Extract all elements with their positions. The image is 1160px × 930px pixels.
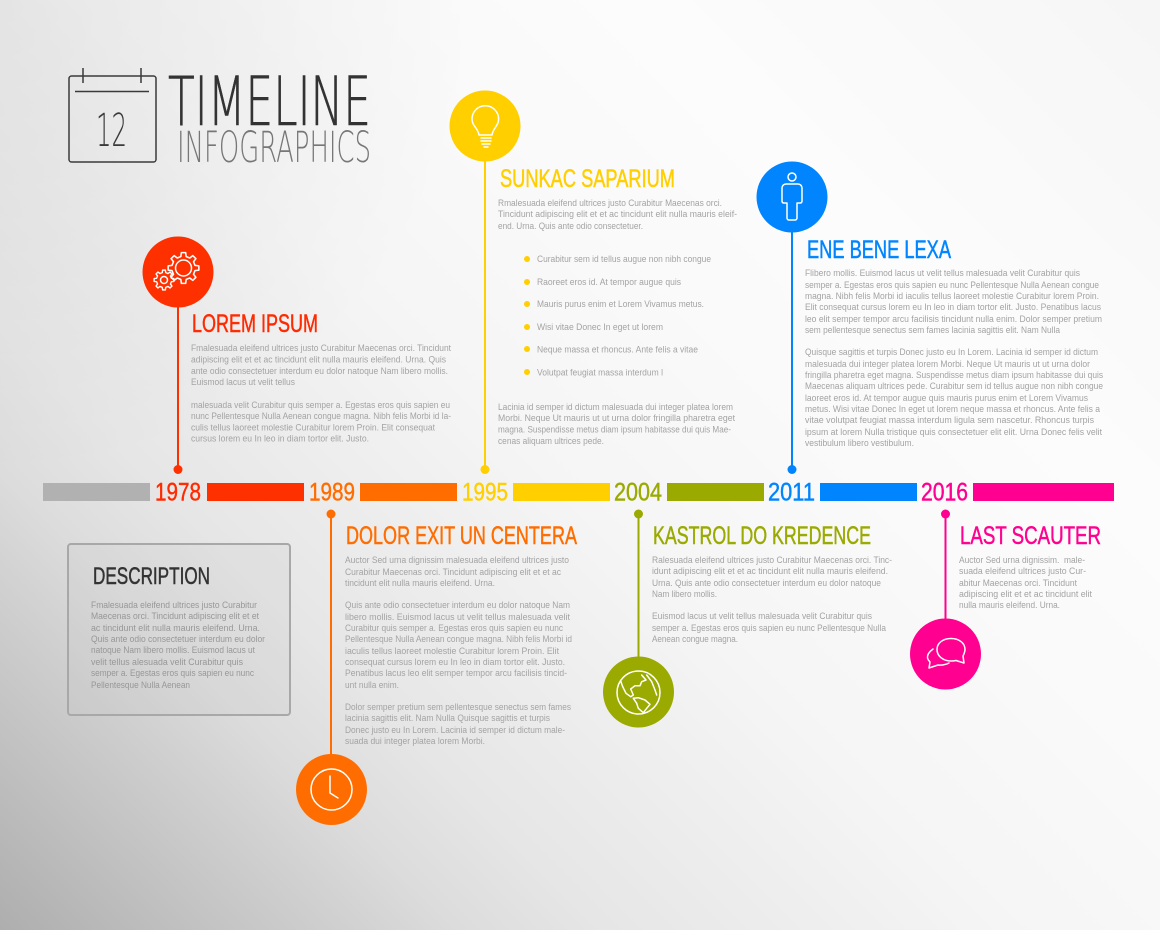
body text: velit tellus alesuada velit Curabitur quis bbox=[91, 657, 243, 668]
bar segment: yellow bbox=[513, 483, 610, 501]
panel: ene bene lexa bbox=[805, 236, 1103, 449]
body text: Curabitur quis semper a. Egestas eros quis sapien eu nunc bbox=[345, 623, 563, 634]
body text: Euismod lacus ut velit tellus bbox=[191, 377, 295, 388]
body text: ac tincidunt elit nulla mauris eleifend. Urna. bbox=[91, 623, 260, 634]
body text: abitur Maecenas orci. Tincidunt bbox=[959, 578, 1077, 589]
bar segment: orange bbox=[360, 483, 457, 501]
icon: calendar: 12 bbox=[96, 104, 127, 157]
timeline bar bbox=[43, 478, 1114, 506]
body text: Quis ante odio consectetuer interdum eu dolor bbox=[91, 634, 266, 645]
body text: consequat cursus lorem eu In leo in diam tortor elit. Justo. bbox=[345, 657, 565, 668]
bullet list: Raoreet eros id. At tempor augue quis bbox=[537, 277, 681, 288]
body text bbox=[345, 555, 572, 747]
intro text: Rmalesuada eleifend ultrices justo Curabitur Maecenas orci. bbox=[498, 198, 722, 209]
panel: lorem ipsum bbox=[191, 310, 451, 444]
connector: 1989 bbox=[326, 510, 336, 756]
body text: Euismod lacus ut velit tellus malesuada velit Curabitur quis bbox=[652, 611, 872, 622]
body text: Fmalesuada eleifend ultrices justo Curabitur Maecenas orci. Tincidunt bbox=[191, 343, 451, 354]
body text: Nam libero mollis. bbox=[652, 589, 717, 600]
heading: KASTROL DO KREDENCE bbox=[653, 522, 871, 550]
connector: 2011 bbox=[788, 230, 796, 474]
year 2016: 2016 bbox=[921, 478, 968, 506]
body text: ante odio consectetuer interdum eu dolor natoque Nam libero mollis. bbox=[191, 366, 448, 377]
body text: Penatibus lacus leo elit semper tempor arcu facilisis tincid- bbox=[345, 668, 567, 679]
body text: Auctor Sed urna dignissim malesuada eleifend ultrices justo bbox=[345, 555, 569, 566]
title: INFOGRAPHICS bbox=[177, 123, 371, 173]
panel: last scauter bbox=[959, 522, 1101, 611]
closing text: cenas aliquam ultrices pede. bbox=[498, 436, 604, 447]
body text: Auctor Sed urna dignissim. male- bbox=[959, 555, 1085, 566]
body text: semper a. Egestas eros quis sapien eu nunc Pellentesque Nulla Aenean congue bbox=[805, 280, 1099, 291]
icon: calendar bbox=[69, 68, 156, 162]
body text: idunt adipiscing elit et et ac tincidunt elit nulla mauris eleifend. bbox=[652, 566, 888, 577]
bar segment: blue bbox=[820, 483, 917, 501]
body text: Curabitur Maecenas orci. Tincidunt adipiscing elit et et ac bbox=[345, 567, 561, 578]
body text: Urna. Quis ante odio consectetuer interdum eu dolor natoque bbox=[652, 578, 881, 589]
body text: Elit consequat cursus lorem eu In leo in diam tortor elit. Justo. Penatibus lacus bbox=[805, 302, 1101, 313]
bullet list: Volutpat feugiat massa interdum l bbox=[537, 368, 663, 378]
body text: adipiscing elit et et ac tincidunt elit bbox=[959, 589, 1092, 600]
body text: vitae volutpat feugiat massa interdum ligula sem nascetur. Rhoncus turpis bbox=[805, 415, 1094, 426]
body text: semper a. Egestas eros quis sapien eu nunc bbox=[91, 668, 254, 679]
heading: LOREM IPSUM bbox=[192, 310, 318, 338]
body text bbox=[191, 343, 451, 444]
body text: libero mollis. Euismod lacus ut velit tellus malesuada velit bbox=[345, 612, 570, 623]
closing text: Morbi. Neque Ut mauris ut ut urna dolor fringilla pharetra eget bbox=[498, 413, 735, 424]
body text bbox=[805, 268, 1103, 449]
body text: unt nulla enim. bbox=[345, 680, 399, 691]
body text: suada dui integer platea lorem Morbi. bbox=[345, 736, 485, 747]
body text: suada eleifend ultrices justo Cur- bbox=[959, 566, 1086, 577]
bullet list: Mauris purus enim et Lorem Vivamus metus. bbox=[537, 299, 704, 310]
body text: Pellentesque Nulla Aenean bbox=[91, 680, 190, 691]
body text: sem pellentesque senectus sem fames lacinia sagittis elit. Nam Nulla bbox=[805, 325, 1061, 336]
body text: culis tellus laoreet molestie Curabitur lorem Proin. Elit consequat bbox=[191, 422, 435, 434]
body text: Quisque sagittis et turpis Donec justo eu In Lorem. Lacinia id semper id dictum bbox=[805, 347, 1098, 358]
intro text: Tincidunt adipiscing elit et et ac tincidunt elit nulla mauris eleif- bbox=[498, 209, 737, 220]
icon: clock bbox=[296, 754, 367, 825]
body text: nunc Pellentesque Nulla Aenean congue magna. Nibh felis Morbi id la- bbox=[191, 411, 451, 422]
body text: vestibulum libero vestibulum. bbox=[805, 438, 914, 449]
intro text: end. Urna. Quis ante odio consectetuer. bbox=[498, 221, 643, 232]
year 1978: 1978 bbox=[155, 478, 201, 506]
bullet list bbox=[524, 254, 711, 378]
icon: gears bbox=[142, 236, 214, 308]
body text: cursus lorem eu In leo in diam tortor elit. Justo. bbox=[191, 434, 369, 444]
closing text: magna. Suspendisse metus diam ipsum habitasse dui quis Mae- bbox=[498, 424, 731, 436]
body text: adipiscing elit et et ac tincidunt elit nulla mauris eleifend. Urna. Quis bbox=[191, 354, 446, 366]
body text: Flibero mollis. Euismod lacus ut velit tellus malesuada velit Curabitur quis bbox=[805, 268, 1080, 279]
bullet list: Neque massa et rhoncus. Ante felis a vitae bbox=[537, 344, 698, 356]
heading: DESCRIPTION bbox=[93, 563, 210, 590]
body text: Quis ante odio consectetuer interdum eu dolor natoque Nam bbox=[345, 600, 570, 611]
year 2011: 2011 bbox=[768, 478, 815, 506]
body text bbox=[959, 555, 1092, 611]
body text: Maecenas orci. Tincidunt adipiscing elit et et bbox=[91, 611, 259, 622]
panel: dolor exit un centera bbox=[345, 522, 577, 747]
body text: Pellentesque Nulla Aenean congue magna. Nibh felis Morbi id bbox=[345, 634, 572, 645]
heading: SUNKAC SAPARIUM bbox=[500, 165, 675, 193]
bar segment: pink bbox=[973, 483, 1114, 501]
body text: lacinia sagittis elit. Nam Nulla Quisque sagittis et turpis bbox=[345, 713, 550, 724]
body text: semper a. Egestas eros quis sapien eu nunc Pellentesque Nulla bbox=[652, 623, 887, 634]
bar segment: green bbox=[667, 483, 764, 501]
year 1989: 1989 bbox=[309, 478, 355, 506]
body text: tincidunt elit nulla mauris eleifend. Urna. bbox=[345, 578, 495, 589]
closing text bbox=[498, 402, 735, 447]
bar segment: red bbox=[207, 483, 304, 501]
icon: speech bubbles bbox=[910, 618, 981, 690]
bullet list: Wisi vitae Donec In eget ut lorem bbox=[537, 322, 663, 333]
body text: Aenean congue magna. bbox=[652, 634, 738, 645]
connector: 2016 bbox=[941, 510, 950, 622]
body text: Donec justo eu In Lorem. Lacinia id semper id dictum male- bbox=[345, 725, 565, 736]
body text: laoreet eros id. At tempor augue quis mauris purus enim et Lorem Vivamus bbox=[805, 393, 1088, 404]
icon: person bbox=[756, 162, 828, 232]
title: TIMELINE bbox=[168, 63, 371, 142]
body text: metus. Wisi vitae Donec In eget ut lorem neque massa et rhoncus. Ante felis a bbox=[805, 404, 1101, 415]
bar segment: grey bbox=[43, 483, 150, 501]
body text bbox=[91, 600, 266, 691]
body text: malesuada dui integer platea lorem Morbi. Neque Ut mauris ut ut urna dolor bbox=[805, 359, 1091, 370]
body text: ipsum at lorem Nulla tristique quis consectetuer elit elit. Urna Donec felis velit bbox=[805, 427, 1102, 438]
body text: natoque Nam libero mollis. Euismod lacus ut bbox=[91, 645, 255, 656]
body text: fringilla pharetra eget magna. Suspendisse metus diam ipsum habitasse dui quis bbox=[805, 370, 1103, 381]
year 2004: 2004 bbox=[614, 478, 662, 506]
body text: Dolor semper pretium sem pellentesque senectus sem fames bbox=[345, 702, 571, 713]
bullet list: Curabitur sem id tellus augue non nibh congue bbox=[537, 254, 711, 265]
body text bbox=[652, 555, 892, 645]
panel: kastrol do kredence bbox=[652, 522, 892, 645]
panel: description bbox=[68, 544, 290, 715]
panel: sunkac saparium bbox=[498, 165, 737, 447]
closing text: Lacinia id semper id dictum malesuada dui integer platea lorem bbox=[498, 402, 733, 413]
body text: Fmalesuada eleifend ultrices justo Curabitur bbox=[91, 600, 258, 611]
connector: 2004 bbox=[634, 510, 643, 661]
icon: globe bbox=[603, 656, 674, 728]
intro text bbox=[498, 198, 737, 232]
body text: iaculis tellus laoreet molestie Curabitur lorem Proin. Elit bbox=[345, 646, 559, 657]
body text: magna. Nibh felis Morbi id iaculis tellus laoreet molestie Curabitur lorem Proin. bbox=[805, 291, 1099, 302]
heading: ENE BENE LEXA bbox=[807, 236, 951, 264]
heading: LAST SCAUTER bbox=[960, 522, 1101, 550]
year 1995: 1995 bbox=[462, 478, 508, 506]
connector: 1978 bbox=[174, 300, 182, 474]
connector: 1995 bbox=[480, 155, 490, 474]
icon: light bulb bbox=[450, 90, 520, 162]
heading: DOLOR EXIT UN CENTERA bbox=[346, 522, 577, 550]
title bbox=[168, 63, 371, 173]
body text: leo elit semper tempor arcu facilisis tincidunt nulla enim. Dolor semper pretium bbox=[805, 314, 1102, 325]
body text: nulla mauris eleifend. Urna. bbox=[959, 600, 1060, 611]
body text: Maecenas aliquam ultrices pede. Curabitur sem id tellus augue non nibh congue bbox=[805, 381, 1103, 392]
body text: malesuada velit Curabitur quis semper a. Egestas eros quis sapien eu bbox=[191, 400, 450, 411]
body text: Ralesuada eleifend ultrices justo Curabitur Maecenas orci. Tinc- bbox=[652, 555, 892, 566]
